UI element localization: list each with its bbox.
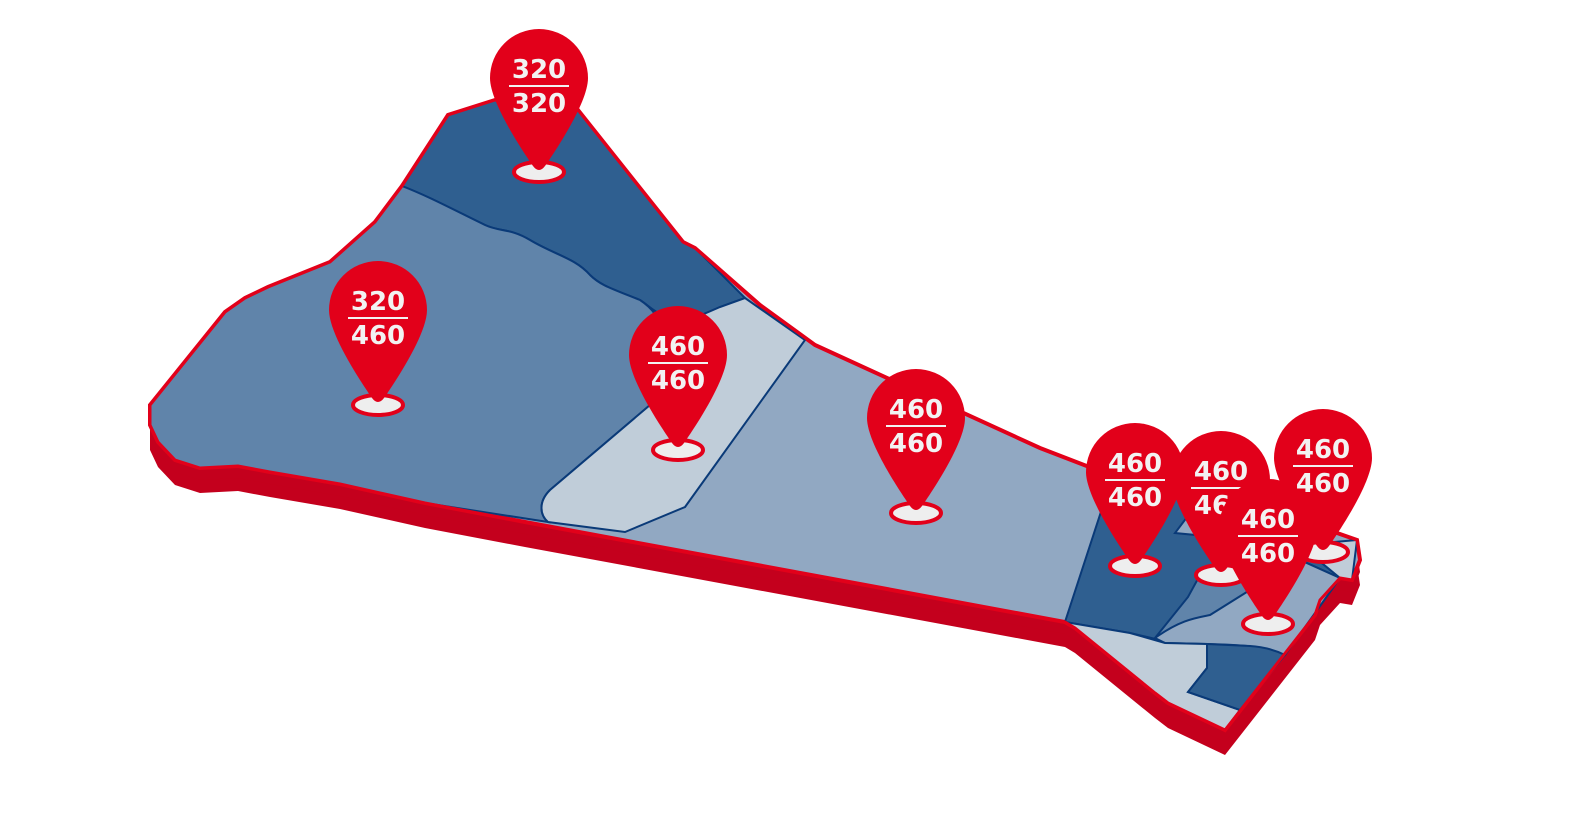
region: east dark bbox=[1065, 478, 1340, 640]
pin: 320/460: 320 bbox=[351, 287, 405, 317]
region: north dark bbox=[402, 100, 745, 320]
pin: 460/460 east 3: 460 bbox=[1296, 435, 1350, 465]
pin: 320/320 bbox=[490, 29, 588, 182]
map top surface bbox=[150, 100, 1360, 730]
region: west bbox=[150, 186, 660, 522]
pin: 320/320: 320 bbox=[512, 55, 566, 85]
pin: 460/460 middle: 460 bbox=[889, 429, 943, 459]
pin: 460/460 east 2: 460 bbox=[1194, 457, 1248, 487]
pin: 460/460 east 4: 460 bbox=[1241, 505, 1295, 535]
pin: 460/460 east 4 bbox=[1219, 479, 1317, 634]
pin: 460/460 east 3 bbox=[1274, 409, 1372, 562]
pin: 460/460 center: 460 bbox=[651, 366, 705, 396]
region: south light bbox=[1065, 622, 1240, 730]
pin: 320/320: 320 bbox=[512, 89, 566, 119]
region: south dark bbox=[1188, 644, 1285, 710]
region: east light corner bbox=[1300, 540, 1357, 580]
pin: 460/460 east 4: 460 bbox=[1241, 539, 1295, 569]
region: east mid bbox=[1155, 560, 1340, 655]
pin: 460/460 east 1: 460 bbox=[1108, 449, 1162, 479]
pin: 460/460 east 1 bbox=[1086, 423, 1184, 576]
pin: 460/460 east 2: 460 bbox=[1194, 491, 1248, 521]
pin: 460/460 east 1: 460 bbox=[1108, 483, 1162, 513]
pin: 460/460 middle: 460 bbox=[889, 395, 943, 425]
pin: 460/460 east 3: 460 bbox=[1296, 469, 1350, 499]
pin: 460/460 east 2 bbox=[1172, 431, 1270, 585]
map side extrusion bbox=[150, 112, 1360, 755]
region: central light strip bbox=[542, 298, 805, 532]
pin: 320/460: 460 bbox=[351, 321, 405, 351]
pin: 460/460 middle bbox=[867, 369, 965, 523]
region: east mid-light bbox=[1155, 560, 1340, 655]
map: district bbox=[150, 100, 1360, 755]
pin: 320/460 bbox=[329, 261, 427, 415]
pin: 460/460 center bbox=[629, 306, 727, 460]
pin: 460/460 center: 460 bbox=[651, 332, 705, 362]
